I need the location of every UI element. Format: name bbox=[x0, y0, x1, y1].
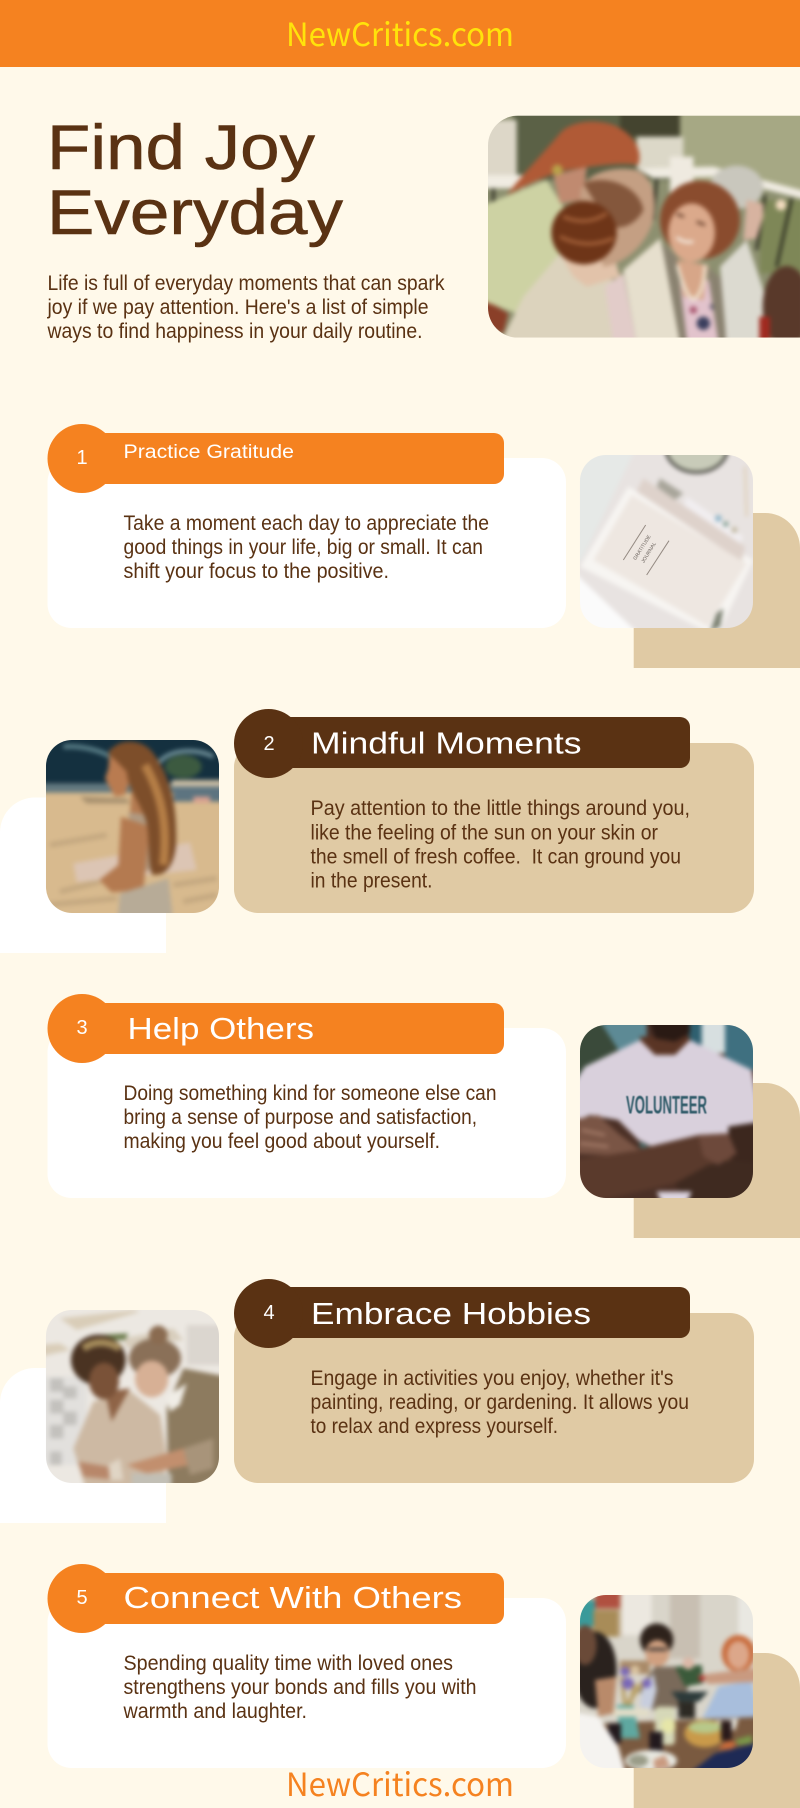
section 3: card bbox=[48, 994, 566, 1198]
section 2: body bbox=[310, 797, 690, 892]
section 3: body: bring a sense of purpose and satisfaction, bbox=[124, 1106, 477, 1129]
section 2: heading bar bbox=[234, 709, 690, 778]
section 3: heading bar: Help Others bbox=[128, 1011, 314, 1046]
section 2: heading bar: 2 bbox=[263, 733, 275, 755]
section 4: background block bbox=[0, 1368, 166, 1523]
section 5: heading bar bbox=[48, 1564, 504, 1633]
photo: friends talking bbox=[480, 110, 800, 347]
intro text: joy if we pay attention. Here's a list of simple bbox=[47, 296, 428, 319]
section 2: body: like the feeling of the sun on your skin or bbox=[310, 822, 658, 844]
section 4: body: Engage in activities you enjoy, whether it's bbox=[310, 1367, 674, 1390]
section 4: body: painting, reading, or gardening. It allows you bbox=[310, 1391, 689, 1414]
section 1: heading bar: Practice Gratitude bbox=[124, 442, 294, 463]
section 1: card bbox=[48, 424, 566, 628]
section 2: body: in the present. bbox=[310, 870, 432, 892]
section 2: card bbox=[234, 709, 754, 913]
section 1: body bbox=[124, 512, 489, 583]
section 3: background block bbox=[634, 1083, 800, 1238]
section 3: body: making you feel good about yourself. bbox=[124, 1130, 440, 1153]
section 4: heading bar: 4 bbox=[263, 1302, 275, 1324]
section 2: background block bbox=[0, 798, 166, 953]
title: Everyday bbox=[47, 178, 344, 248]
photo: gratitude journal: GRATITUDE bbox=[632, 534, 653, 561]
header band: NewCritics.com bbox=[286, 10, 514, 56]
section 1: body: Take a moment each day to appreciate the bbox=[124, 512, 489, 535]
intro text bbox=[47, 272, 445, 343]
intro text: Life is full of everyday moments that can spark bbox=[48, 272, 445, 295]
section 1: heading bar bbox=[48, 424, 504, 493]
photo: woman with yoga mat bbox=[46, 740, 219, 913]
photo: volunteer shirt: VOLUNTEER bbox=[626, 1091, 707, 1119]
photo: pottery hobby bbox=[46, 1310, 219, 1483]
section 1: heading bar: 1 bbox=[76, 447, 88, 469]
section 5: body: warmth and laughter. bbox=[123, 1700, 307, 1723]
section 4: heading bar bbox=[234, 1279, 690, 1348]
section 5: body bbox=[123, 1652, 477, 1723]
section 5: heading bar: 5 bbox=[76, 1587, 88, 1609]
section 2: body: Pay attention to the little things around you, bbox=[310, 797, 690, 820]
photo: gratitude journal: JOURNAL bbox=[640, 541, 658, 564]
photo: volunteer shirt bbox=[580, 1025, 753, 1198]
section 4: heading bar: Embrace Hobbies bbox=[311, 1296, 591, 1331]
section 5: background block bbox=[634, 1653, 800, 1808]
section 5: heading bar: Connect With Others bbox=[124, 1580, 462, 1615]
section 1: background block bbox=[634, 513, 800, 668]
header band bbox=[0, 0, 800, 67]
section 3: body: Doing something kind for someone else can bbox=[124, 1082, 496, 1105]
title bbox=[47, 113, 344, 248]
section 5: card bbox=[48, 1564, 566, 1768]
section 1: body: shift your focus to the positive. bbox=[124, 560, 389, 583]
intro text: ways to find happiness in your daily routine. bbox=[47, 320, 422, 343]
photo: gratitude journal bbox=[580, 455, 753, 628]
section 5: body: Spending quality time with loved ones bbox=[124, 1652, 453, 1675]
section 3: heading bar: 3 bbox=[76, 1017, 88, 1039]
section 4: body bbox=[310, 1367, 689, 1438]
title: Find Joy bbox=[47, 113, 316, 183]
section 2: heading bar: Mindful Moments bbox=[311, 726, 582, 760]
section 5: body: strengthens your bonds and fills you with bbox=[124, 1676, 476, 1699]
section 2: body: the smell of fresh coffee. It can ground you bbox=[310, 846, 681, 868]
section 3: heading bar bbox=[48, 994, 504, 1063]
section 4: card bbox=[234, 1279, 754, 1483]
photo: friends at table bbox=[580, 1595, 753, 1768]
section 1: body: good things in your life, big or small. It can bbox=[124, 536, 483, 559]
footer brand: NewCritics.com bbox=[286, 1760, 514, 1806]
section 3: body bbox=[124, 1082, 496, 1153]
section 4: body: to relax and express yourself. bbox=[310, 1415, 558, 1438]
